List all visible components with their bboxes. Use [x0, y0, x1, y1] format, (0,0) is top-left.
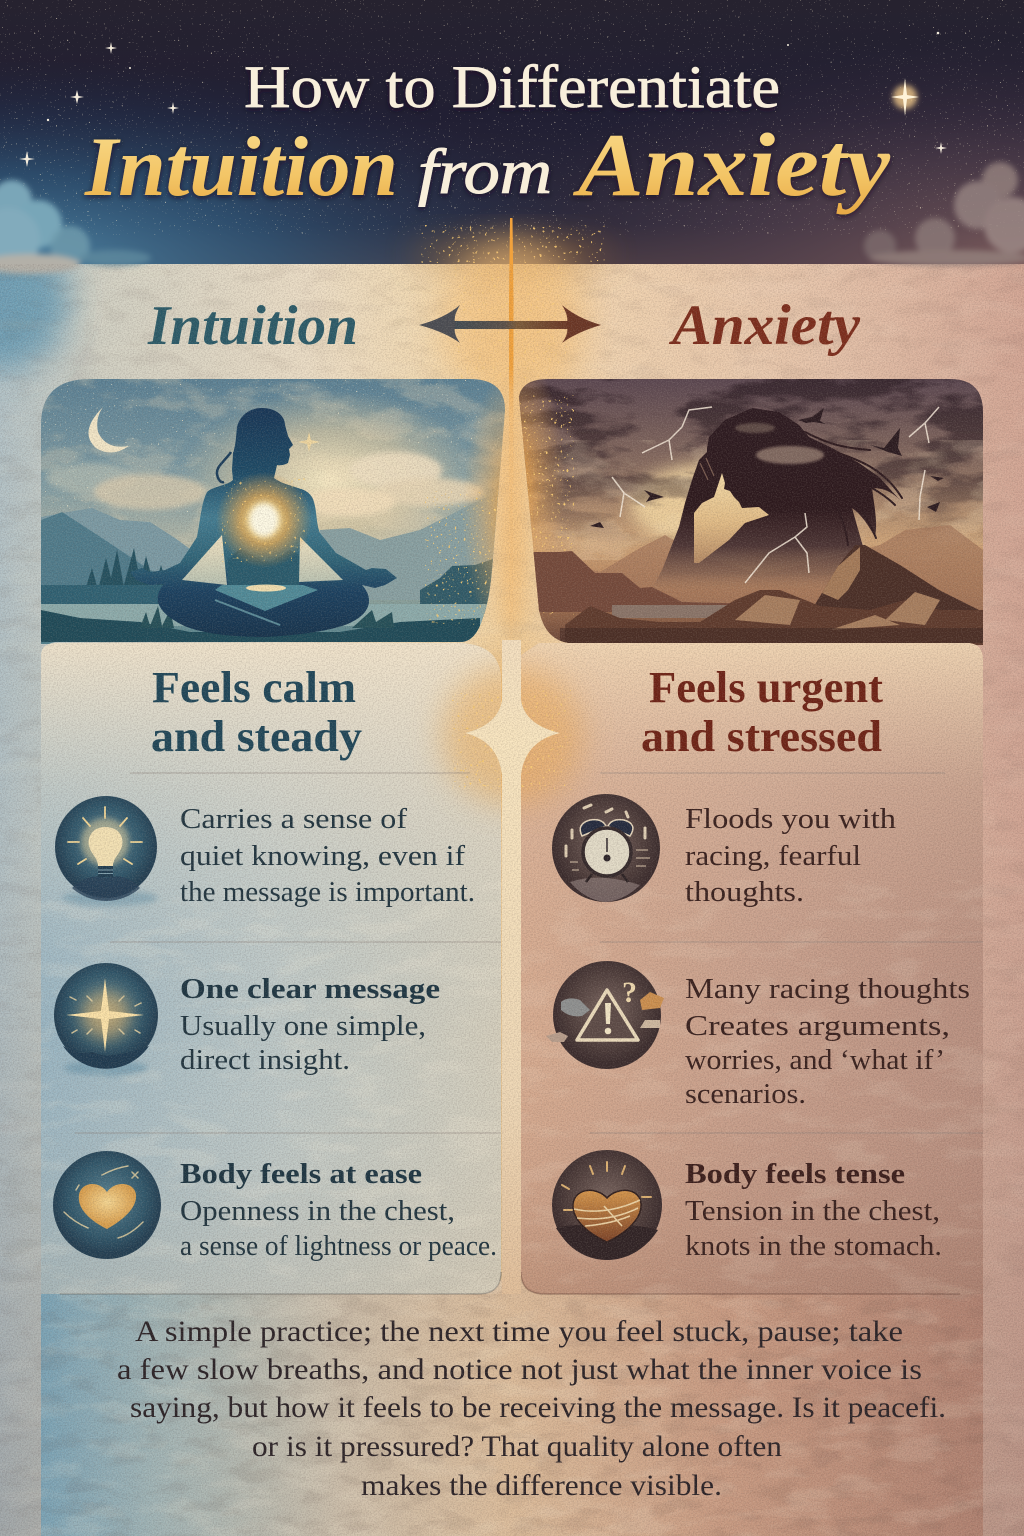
text: calm row 1: quiet knowing, even if — [180, 840, 465, 872]
text: calm row 2 — [180, 973, 440, 1076]
panel: intuition text card — [41, 643, 501, 1294]
text: urgent row 2: worries, and ‘what if’ — [685, 1044, 945, 1076]
trees — [86, 548, 164, 585]
text: calm row 2: One clear message — [180, 973, 440, 1005]
lightning — [612, 407, 939, 583]
panel: anxiety text card — [521, 643, 983, 1294]
heading: Feels urgent and stressed — [641, 663, 883, 761]
hair lock — [217, 452, 231, 482]
centre light beam — [441, 218, 582, 805]
lake — [612, 605, 747, 618]
double-headed arrow — [419, 305, 601, 343]
horizon glow — [188, 394, 470, 540]
illustration: meditating woman — [41, 379, 505, 644]
closing practice note — [117, 1315, 946, 1502]
silhouette — [130, 408, 397, 637]
icon: warning triangle — [546, 961, 664, 1069]
hair strands — [805, 432, 902, 545]
arm gaps — [182, 535, 343, 585]
far mountains — [41, 508, 190, 572]
grass — [41, 610, 480, 642]
icon: bound broken heart — [552, 1150, 662, 1260]
icon: light bulb — [55, 796, 158, 906]
lit peak faces — [822, 547, 860, 600]
column heading: Anxiety: Anxiety — [669, 294, 861, 357]
orange glow at the edge — [519, 380, 562, 552]
icon: four-point star — [54, 963, 158, 1076]
title word: Intuition: Intuition — [84, 120, 398, 214]
storm sky — [515, 379, 985, 644]
text: urgent row 3 — [685, 1158, 942, 1262]
title word: from: from — [418, 136, 552, 207]
bright star, top right — [891, 78, 919, 116]
heading: Feels calm and steady — [151, 663, 362, 761]
lake — [41, 604, 506, 626]
title — [84, 54, 891, 215]
cloud texture — [41, 379, 506, 544]
text: calm row 3: a sense of lightness or peace. — [180, 1230, 497, 1262]
left clouds — [0, 180, 151, 274]
text: calm row 3: Body feels at ease — [180, 1158, 422, 1190]
sky — [41, 379, 506, 644]
text: calm row 3 — [180, 1158, 497, 1262]
cream glow behind face — [622, 454, 704, 540]
small header stars — [19, 32, 947, 167]
foreground rocks — [565, 590, 983, 645]
orange glow at the edge — [466, 387, 505, 612]
text: urgent row 2: Many racing thoughts — [685, 973, 970, 1005]
birds — [590, 408, 944, 528]
heart light — [216, 472, 312, 568]
text: calm row 1: Carries a sense of — [180, 803, 407, 835]
card textures — [41, 880, 983, 1294]
text: calm row 2: direct insight. — [180, 1044, 350, 1076]
text: urgent row 1: Floods you with — [685, 803, 897, 835]
text: calm row 1: the message is important. — [180, 876, 475, 908]
bright star — [298, 432, 320, 452]
text: urgent row 1: racing, fearful — [685, 840, 861, 872]
icon: alarm clock — [552, 794, 660, 902]
night sky header — [0, 0, 1024, 274]
mid mountains — [534, 551, 730, 612]
right clouds — [864, 162, 1024, 266]
icon: warning triangle: ? — [622, 976, 637, 1009]
heading: Feels urgent and stressed: Feels urgent — [649, 663, 883, 712]
gap under the chin — [694, 473, 769, 563]
far mountains — [530, 525, 983, 610]
text: urgent row 1: thoughts. — [685, 876, 804, 908]
text: calm row 2: Usually one simple, — [180, 1010, 426, 1042]
column heading: Intuition: Intuition — [147, 295, 358, 357]
sparkle star on the beam — [465, 640, 560, 1294]
moon — [88, 407, 129, 453]
closing practice note: A simple practice; the next time you feel stuck, pause; take — [135, 1315, 903, 1348]
fingers — [700, 458, 714, 480]
text: urgent row 3: Body feels tense — [685, 1158, 905, 1190]
text: urgent row 2: scenarios. — [685, 1078, 806, 1110]
closing practice note: or is it pressured? That quality alone often — [252, 1430, 782, 1463]
heading: Feels urgent and stressed: and stressed — [641, 712, 882, 761]
text: urgent row 2: Creates arguments, — [685, 1010, 950, 1042]
lake reflection in body — [215, 585, 318, 611]
torso mountains — [228, 548, 299, 585]
heading: Feels calm and steady: Feels calm — [152, 663, 356, 712]
footer panel — [41, 1280, 983, 1536]
foreground peak — [790, 545, 983, 645]
closing practice note: saying, but how it feels to be receiving the message. Is it peacefi. — [130, 1391, 946, 1424]
text: urgent row 3: Tension in the chest, — [685, 1195, 940, 1227]
dark clouds — [515, 379, 985, 549]
leg crease — [215, 600, 280, 625]
gold dust — [411, 236, 611, 272]
title word: Anxiety: Anxiety — [573, 116, 891, 215]
text: urgent row 2 — [685, 973, 970, 1110]
text: calm row 1 — [180, 803, 475, 908]
clouds — [46, 452, 484, 516]
closing practice note: makes the difference visible. — [361, 1469, 722, 1502]
text: calm row 3: Openness in the chest, — [180, 1195, 455, 1227]
icon: glowing heart — [53, 1151, 161, 1259]
silhouette body and hair — [650, 408, 902, 592]
heading: Feels calm and steady: and steady — [151, 712, 362, 761]
row dividers — [75, 773, 983, 1133]
text: urgent row 1 — [685, 803, 897, 908]
text: urgent row 3: knots in the stomach. — [685, 1230, 942, 1262]
hair cloud — [756, 446, 824, 464]
closing practice note: a few slow breaths, and notice not just what the inner voice is — [117, 1353, 922, 1386]
title line 1: How to Differentiate — [244, 54, 780, 120]
illustration: stressed woman in storm — [519, 379, 983, 645]
